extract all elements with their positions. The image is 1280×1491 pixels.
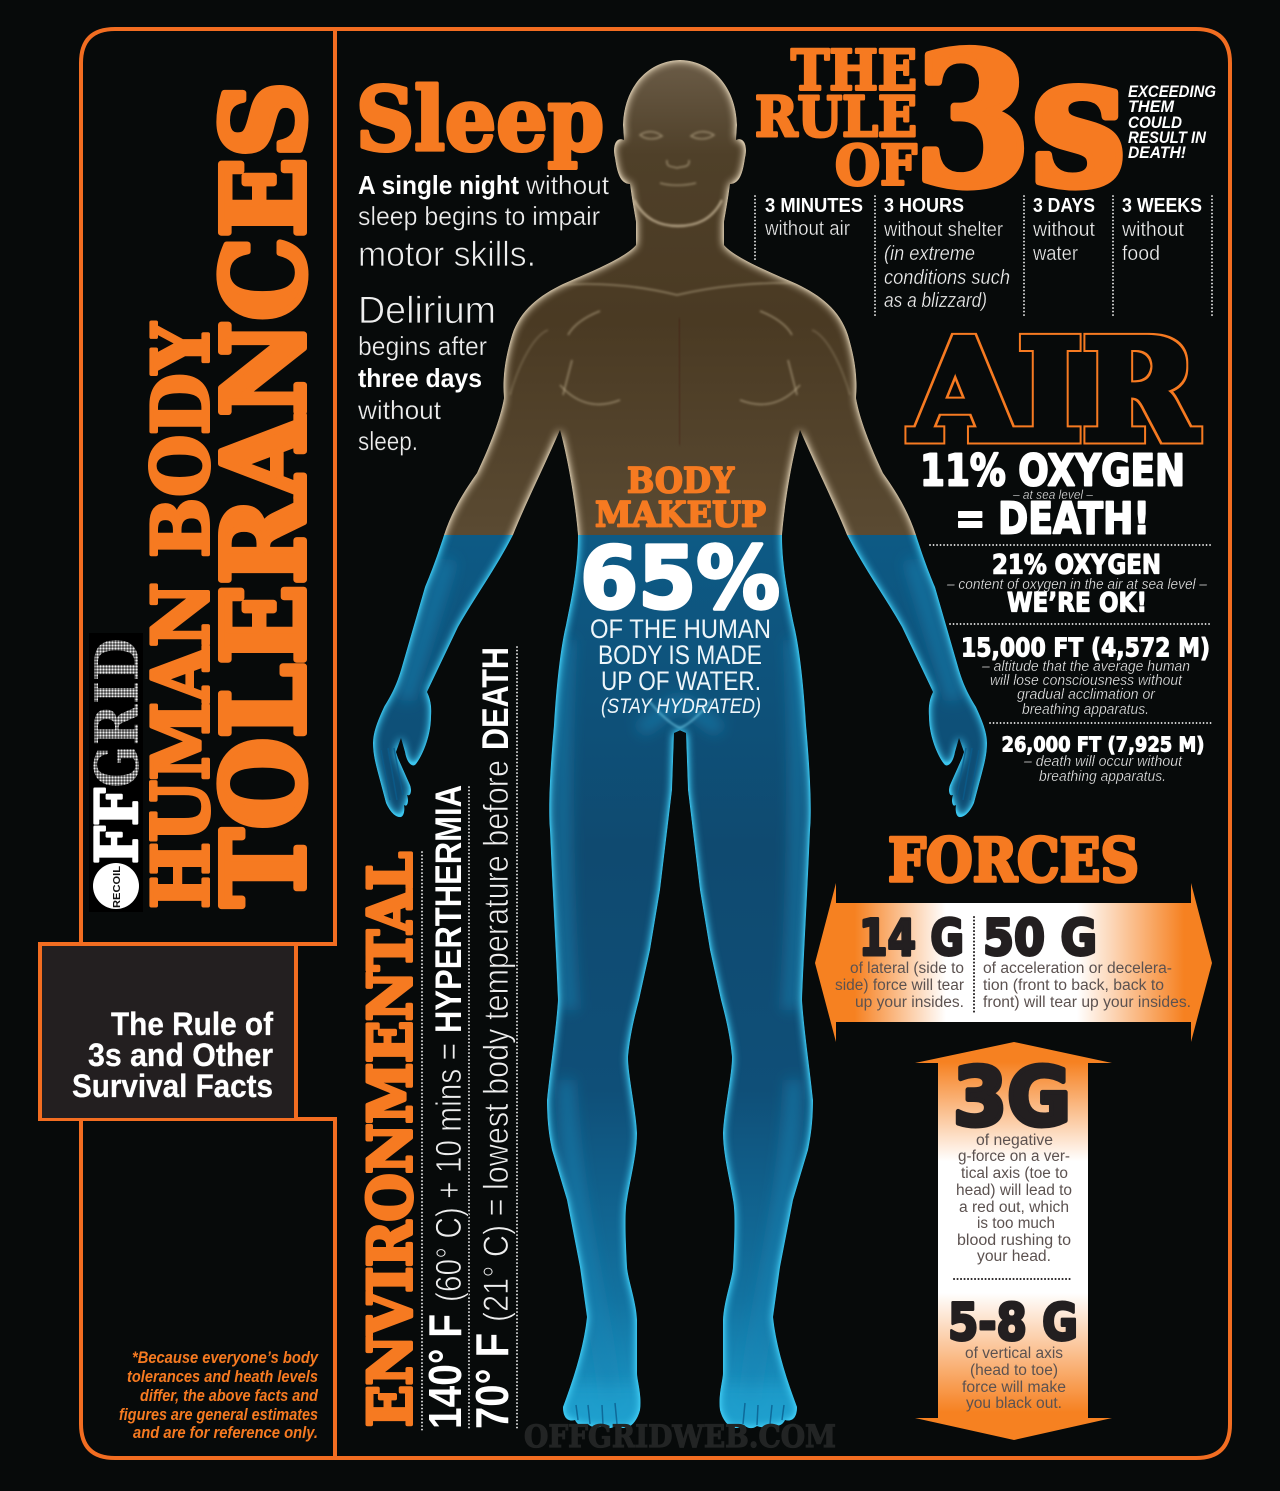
heading: the rule of 3s: OF (835, 132, 917, 198)
11 percent oxygen: = DEATH! (955, 494, 1150, 544)
note: exceeding them: THEM (1128, 98, 1175, 116)
3 g fact: your head. (977, 1248, 1051, 1265)
3 g fact: of negative (976, 1132, 1053, 1149)
rule: 3 days: water (1032, 242, 1078, 265)
rule: 3 minutes: 3 MINUTES (765, 194, 863, 217)
subtitle box: 3s and Other (88, 1037, 273, 1073)
50 g fact: tion (front to back, back to (983, 977, 1164, 994)
heading: the rule of 3s (755, 13, 1126, 227)
50 g fact: of acceleration or decelera- (983, 960, 1172, 977)
environmental fact: hyperthermia (419, 785, 471, 1429)
logo: off grid (83, 633, 153, 912)
rule: 3 weeks: food (1122, 242, 1160, 265)
subtitle box: Survival Facts (72, 1068, 273, 1104)
50 g fact (983, 909, 1191, 1011)
5-8 g fact: of vertical axis (965, 1345, 1063, 1362)
15,000 ft: gradual acclimation or (1017, 686, 1156, 703)
15,000 ft: breathing apparatus. (1022, 701, 1149, 718)
note: exceeding them: COULD (1128, 114, 1182, 132)
heading: body makeup (595, 460, 766, 536)
sleep facts: A single night (358, 170, 519, 200)
human body figure (360, 50, 1000, 1435)
rule: 3 minutes (764, 194, 863, 240)
horizontal arrow panel (815, 883, 1212, 1042)
sleep facts: three days (358, 363, 482, 393)
note: exceeding them: RESULT IN (1128, 129, 1207, 147)
5-8 g fact: (head to toe) (970, 1362, 1058, 1379)
subtitle box: The Rule of (111, 1006, 273, 1042)
heading: the rule of 3s: RULE (755, 84, 917, 149)
arrow shape (815, 883, 1212, 1042)
logo: off grid: FF (83, 788, 151, 864)
footnote: differ, the above facts and (140, 1387, 319, 1405)
heading: sleep: Sleep (356, 68, 604, 171)
rule: 3 hours: without shelter (883, 218, 1003, 241)
title: tolerances: TOLERANCES (200, 82, 330, 907)
sleep facts: without (357, 395, 442, 425)
rule: 3 weeks: 3 WEEKS (1122, 194, 1202, 217)
note: exceeding them: EXCEEDING (1128, 83, 1216, 101)
21 percent oxygen: 21% OXYGEN (992, 550, 1161, 580)
stat: 65 percent water: 65% (580, 529, 780, 629)
logo: off grid: GRID (83, 638, 153, 788)
26,000 ft (1002, 732, 1204, 785)
3 g fact: 3G (953, 1051, 1071, 1144)
15,000 ft (961, 634, 1210, 718)
stat: 65 percent water: UP OF WATER. (601, 666, 761, 696)
14 g fact: up your insides. (855, 994, 964, 1011)
vertical arrow panel (915, 1042, 1112, 1440)
stat: 65 percent water: (STAY HYDRATED) (601, 695, 761, 718)
air facts (920, 446, 1212, 785)
rule: 3 hours: as a blizzard) (884, 289, 987, 312)
21 percent oxygen (946, 550, 1208, 618)
heading: body makeup: MAKEUP (595, 494, 766, 536)
rule: 3 minutes: without air (764, 217, 850, 240)
stat: 65 percent water (580, 529, 780, 718)
subtitle box (42, 944, 296, 1119)
5-8 g fact (948, 1294, 1078, 1412)
sleep facts (357, 170, 610, 456)
footnote: *Because everyone’s body (132, 1349, 319, 1367)
rule: 3 days: without (1032, 218, 1095, 241)
15,000 ft: – altitude that the average human (981, 658, 1190, 675)
section: sleep (356, 68, 610, 456)
5-8 g fact: force will make (962, 1379, 1066, 1396)
sleep facts: sleep. (358, 426, 418, 456)
note: exceeding them (1128, 83, 1216, 162)
3 g fact: head) will lead to (956, 1182, 1072, 1199)
footnote: figures are general estimates (119, 1406, 318, 1424)
footnote: tolerances and heath levels (127, 1368, 318, 1386)
rule: 3 days (1032, 194, 1095, 265)
environmental fact: lowest temperature (466, 647, 518, 1429)
3 g fact (953, 1051, 1072, 1265)
rule: 3 weeks: without (1121, 218, 1184, 241)
5-8 g fact: you black out. (966, 1395, 1062, 1412)
11 percent oxygen: – at sea level – (1012, 487, 1094, 502)
11 percent oxygen (920, 446, 1185, 544)
26,000 ft: – death will occur without (1023, 753, 1183, 770)
heading: environmental: ENVIRONMENTAL (356, 852, 426, 1427)
environmental fact: lowest temperature: DEATH (475, 647, 516, 750)
14 g fact: 14 G (859, 909, 964, 967)
14 g fact: side) force will tear (835, 977, 964, 994)
3 g fact: is too much (977, 1215, 1055, 1232)
3 g fact: tical axis (toe to (961, 1165, 1068, 1182)
environmental fact: hyperthermia: 140° F (419, 1314, 471, 1429)
26,000 ft: breathing apparatus. (1039, 768, 1166, 785)
heading: the rule of 3s: 3s (914, 13, 1126, 227)
3 g fact: g-force on a ver- (958, 1148, 1070, 1165)
50 g fact: 50 G (983, 909, 1097, 967)
rule: 3 days: 3 DAYS (1033, 194, 1095, 217)
logo: off grid: RECOIL (112, 866, 123, 908)
heading: forces: FORCES (888, 826, 1139, 896)
sleep facts: sleep begins to impair (358, 201, 600, 231)
environmental fact: lowest temperature: 70° F (466, 1333, 518, 1429)
14 g fact (835, 909, 964, 1011)
5-8 g fact: 5-8 G (948, 1294, 1078, 1353)
26,000 ft: 26,000 FT (7,925 M) (1002, 732, 1204, 756)
3 g fact: blood rushing to (957, 1232, 1071, 1249)
title: human body: HUMAN BODY (136, 322, 227, 909)
sleep facts: motor skills. (358, 235, 536, 274)
50 g fact: front) will tear up your insides. (983, 994, 1191, 1011)
environmental fact: hyperthermia: (60° C) + 10 mins = (428, 1043, 469, 1302)
sleep facts: without (525, 170, 610, 200)
heading: air: AIR (909, 309, 1198, 472)
3 g fact: a red out, which (959, 1199, 1069, 1216)
footnote (119, 1349, 319, 1442)
note: exceeding them: DEATH! (1128, 144, 1186, 162)
rule: 3 hours: (in extreme (884, 242, 975, 265)
muscle and face lines (510, 132, 850, 404)
15,000 ft: will lose consciousness without (990, 672, 1183, 689)
stat: 65 percent water: BODY IS MADE (598, 640, 762, 670)
environmental fact: hyperthermia: HYPERTHERMIA (428, 785, 469, 1033)
sleep facts: begins after (358, 331, 487, 361)
15,000 ft: 15,000 FT (4,572 M) (961, 634, 1210, 664)
watermark: OFFGRIDWEB.COM (524, 1419, 836, 1455)
21 percent oxygen: WE’RE OK! (1007, 588, 1147, 618)
heading: the rule of 3s: THE (791, 38, 917, 102)
11 percent oxygen: 11% OXYGEN (920, 446, 1185, 496)
21 percent oxygen: – content of oxygen in the air at sea level – (946, 576, 1208, 593)
footnote: and are for reference only. (133, 1424, 318, 1442)
14 g fact: of lateral (side to (850, 960, 964, 977)
rule: 3 weeks (1121, 194, 1202, 265)
rule: 3 hours: 3 HOURS (884, 194, 964, 217)
soft leg and arm highlights (405, 560, 955, 1400)
heading: body makeup: BODY (627, 460, 735, 502)
stat: 65 percent water: OF THE HUMAN (590, 614, 771, 644)
rule: 3 hours: conditions such (884, 266, 1010, 289)
environmental fact: lowest temperature: (21° C) = lowest body temperature before (477, 760, 516, 1322)
rule: 3 hours (883, 194, 1010, 312)
sleep facts: Delirium (358, 290, 496, 332)
arrow shape (915, 1042, 1112, 1440)
